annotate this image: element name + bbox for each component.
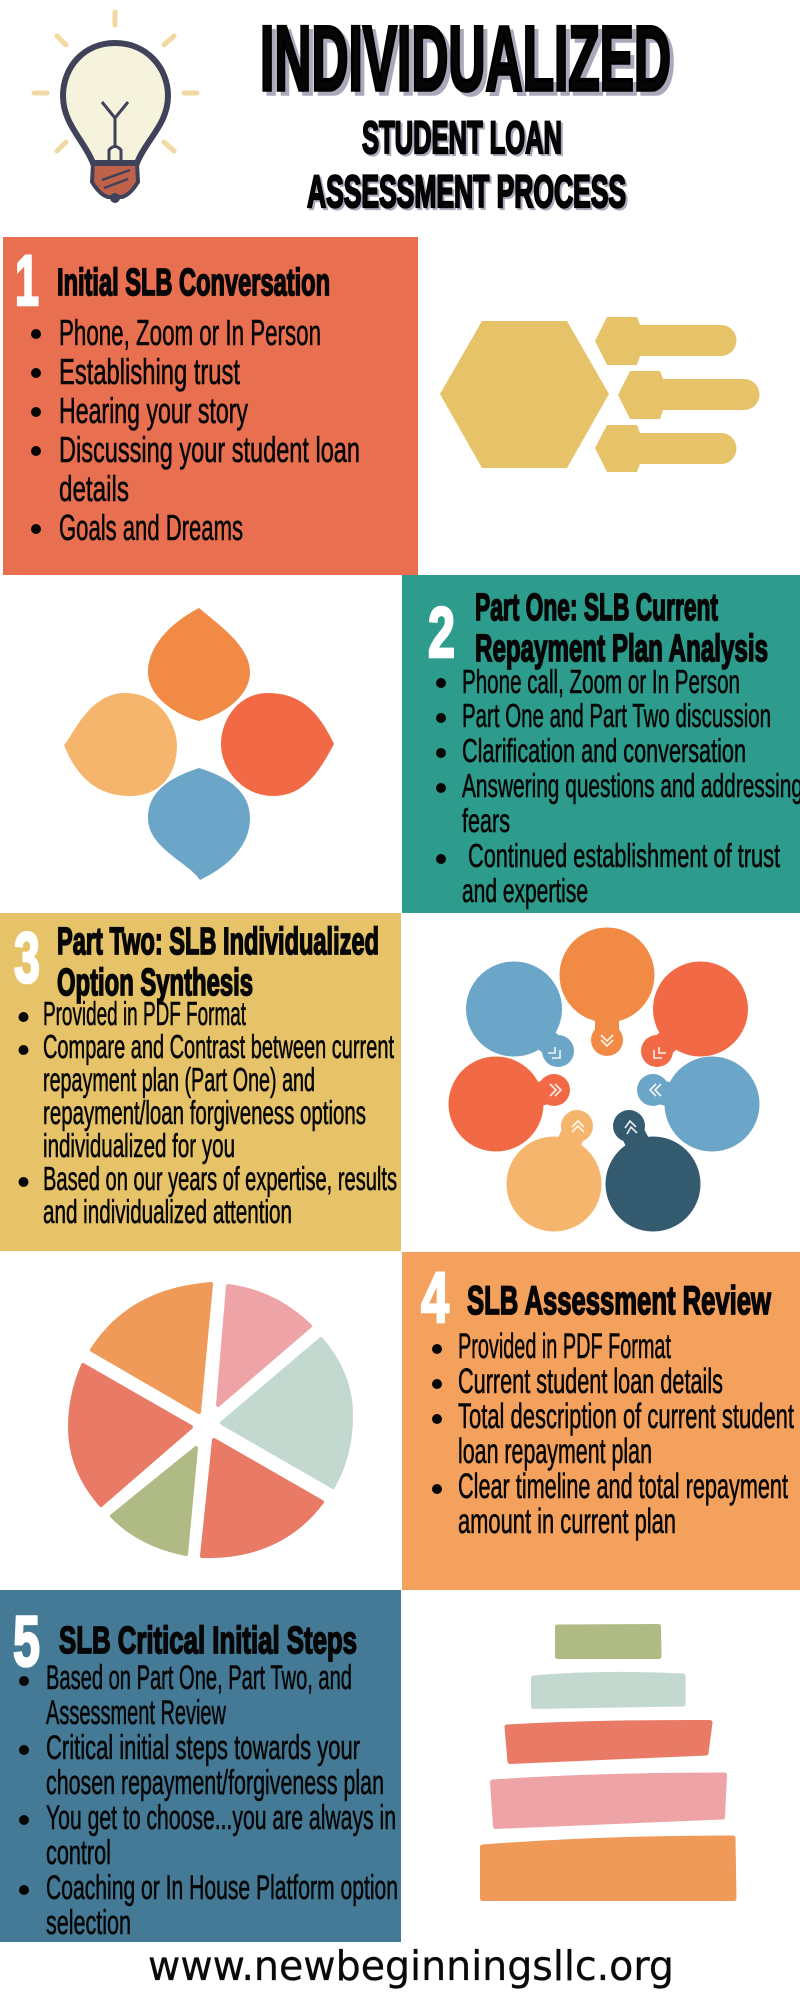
bullet list bbox=[19, 1659, 398, 1942]
icon: four petals bbox=[64, 608, 334, 880]
bullet list: Compare and Contrast between current bbox=[43, 1028, 394, 1065]
panel: step 5 bbox=[0, 1590, 401, 1942]
bullet list: Coaching or In House Platform option bbox=[46, 1869, 398, 1907]
bullet list: and individualized attention bbox=[43, 1193, 292, 1230]
icon: light bulb bbox=[34, 12, 197, 203]
subtitle: STUDENT LOAN bbox=[362, 112, 562, 163]
bullet list: chosen repayment/forgiveness plan bbox=[46, 1764, 384, 1802]
number 2: 2 bbox=[428, 594, 455, 673]
panel: step 2 bbox=[402, 575, 800, 913]
bullet list: loan repayment plan bbox=[458, 1432, 652, 1471]
bullet list: Provided in PDF Format bbox=[43, 995, 246, 1032]
bullet list: Based on Part One, Part Two, and bbox=[46, 1659, 352, 1697]
bullet list: and expertise bbox=[462, 872, 588, 909]
bullet list: selection bbox=[46, 1904, 131, 1942]
heading: Option Synthesis bbox=[57, 962, 253, 1004]
icon: ring of seven bubbles bbox=[448, 928, 760, 1232]
bullet list: Hearing your story bbox=[59, 390, 248, 431]
panel background bbox=[0, 1590, 401, 1942]
panel: step 1 bbox=[3, 237, 418, 575]
bullet list bbox=[432, 1327, 794, 1541]
panel: step 3 bbox=[0, 913, 401, 1251]
heading bbox=[475, 587, 768, 670]
bullet list: Goals and Dreams bbox=[59, 507, 243, 548]
bullet list bbox=[18, 995, 397, 1230]
bullet list: You get to choose...you are always in bbox=[46, 1799, 396, 1837]
icon: hexagon with three arrows bbox=[440, 317, 760, 472]
number 4: 4 bbox=[421, 1259, 449, 1338]
icon: stacked pyramid bars bbox=[482, 1626, 734, 1898]
bullet list: Based on our years of expertise, results bbox=[43, 1160, 397, 1197]
bullet list: Critical initial steps towards your bbox=[46, 1729, 360, 1767]
number 5: 5 bbox=[13, 1603, 40, 1682]
bullet list: control bbox=[46, 1834, 111, 1872]
panel background bbox=[3, 237, 418, 575]
chart: pie of six slices bbox=[70, 1284, 351, 1556]
bullet list: Phone, Zoom or In Person bbox=[59, 312, 321, 353]
subtitle bbox=[307, 112, 626, 217]
bullet list: Assessment Review bbox=[46, 1694, 226, 1732]
bullet list: details bbox=[59, 468, 129, 509]
bullet list bbox=[31, 312, 360, 548]
bullet list: repayment plan (Part One) and bbox=[43, 1061, 315, 1098]
panel background bbox=[402, 575, 800, 913]
panel background bbox=[402, 1252, 800, 1590]
website url: www.newbeginningsllc.org bbox=[148, 1942, 674, 1990]
heading: SLB Critical Initial Steps bbox=[59, 1620, 357, 1662]
bullet list bbox=[436, 663, 800, 909]
number 1: 1 bbox=[15, 242, 39, 321]
bullet list: repayment/loan forgiveness options bbox=[43, 1094, 366, 1131]
heading bbox=[57, 921, 379, 1004]
heading: Part Two: SLB Individualized bbox=[57, 921, 379, 963]
bullet list: amount in current plan bbox=[458, 1502, 676, 1541]
bullet list: fears bbox=[462, 802, 510, 839]
bullet list: Establishing trust bbox=[59, 351, 240, 392]
panel background bbox=[0, 913, 401, 1251]
bullet list: individualized for you bbox=[43, 1127, 235, 1164]
panel: step 4 bbox=[402, 1252, 800, 1590]
bullet list: Discussing your student loan bbox=[59, 429, 360, 470]
heading: Initial SLB Conversation bbox=[57, 262, 330, 304]
number 3: 3 bbox=[14, 919, 40, 998]
